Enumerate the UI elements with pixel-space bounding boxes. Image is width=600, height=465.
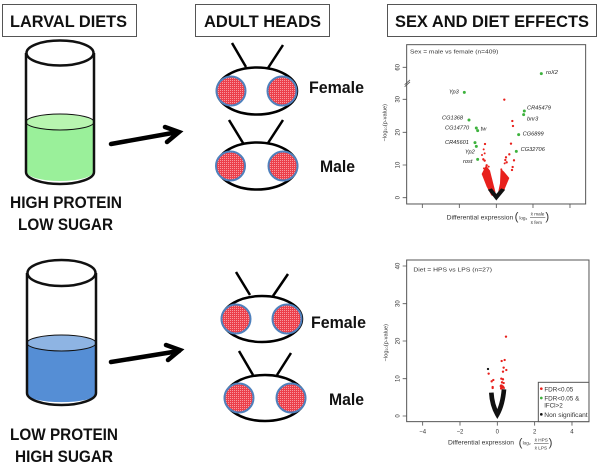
green highly differential genes [463,72,543,161]
x axis formula: ) [545,211,549,223]
label: high protein low sugar: HIGH PROTEIN [10,194,122,212]
arrow: high protein diet to adult heads [111,127,179,144]
heading: sex and diet effects [388,4,596,36]
y axis ticks and labels: 30 [395,300,401,307]
chart title: Diet = HPS vs LPS (n=27) [413,268,492,274]
icon: male head, high protein diet [216,120,298,190]
x axis title: Differential expression [448,440,514,446]
x axis formula: x̄ HPS [535,437,548,442]
legend: Non significant [544,412,588,419]
y axis ticks and labels: 2 [533,429,537,435]
red significant genes [481,98,515,197]
gene labels: rost [463,159,473,165]
label: low protein high sugar [10,426,118,465]
y axis ticks and labels: 0 [395,195,401,199]
legend: lFCl>2 [544,402,563,409]
chart: volcano plot diet effect [383,260,589,450]
x axis formula [515,211,549,225]
icon: female head, low protein diet [222,272,302,342]
y axis ticks and labels: 0 [496,429,500,435]
gene labels [442,70,559,165]
label: female: Female [311,314,366,332]
black non-significant genes [487,368,504,414]
legend: FDR<0.05 & [544,395,580,402]
gene labels: CR45601 [445,140,469,146]
gene labels: CR45479 [527,105,552,111]
icon: male head, low protein diet [224,351,306,421]
legend [538,382,589,422]
icon: vial with green high protein diet [26,40,94,184]
legend: FDR<0.05 [544,386,574,393]
gene labels: CG32706 [521,147,546,153]
x axis formula [519,437,553,450]
chart title: Sex = male vs female (n=409) [410,49,499,55]
y axis ticks and labels: 60 [395,63,401,71]
label: high protein low sugar [10,194,122,234]
y axis ticks and labels: 40 [395,262,401,269]
gene labels: bnr3 [527,117,539,123]
y axis ticks and labels: −2 [457,429,464,435]
x axis formula: x̄ fem [531,220,542,225]
x axis formula: log₂ [523,441,531,446]
label: female: Female [309,79,364,97]
y axis ticks and labels: 0 [395,414,401,418]
heading: larval diets [2,4,136,36]
gene labels: CG1368 [442,115,464,121]
x axis formula: x̄ LPS [535,445,547,450]
y axis ticks and labels: 4 [570,429,574,435]
label: low protein high sugar: LOW PROTEIN [10,426,118,444]
heading: sex and diet effects: SEX AND DIET EFFECTS [395,13,589,31]
y axis title: −log₁₀(p-value) [383,104,389,141]
y axis ticks and labels: −4 [419,429,427,435]
x axis title: Differential expression [447,215,513,221]
icon: vial with blue low protein diet [27,260,96,407]
x axis formula: ( [515,211,519,223]
y axis ticks and labels [395,262,574,435]
red significant genes [487,335,507,390]
label: male: Male [329,391,364,409]
gene labels: roX2 [546,70,559,76]
arrow: low protein diet to adult heads [111,345,180,362]
gene labels: Yp3 [449,90,460,96]
icon: female head, high protein diet [216,43,297,114]
heading: larval diets: LARVAL DIETS [10,13,127,31]
y axis title: −log₁₀(p-value) [383,324,389,361]
x axis formula: ( [519,437,523,449]
y axis ticks and labels: 10 [395,375,401,382]
y axis ticks and labels: 20 [395,128,401,136]
chart: volcano plot sex effect [383,45,586,225]
y axis ticks and labels: 10 [395,161,401,168]
label: high protein low sugar: LOW SUGAR [18,216,113,234]
gene labels: CG6899 [523,131,545,137]
x axis formula: log₂ [519,215,528,220]
label: male: Male [320,158,355,176]
black non-significant genes [489,189,504,200]
heading: adult heads: ADULT HEADS [204,13,321,31]
x axis formula: x̄ male [531,211,545,216]
gene labels: Yp2 [465,150,476,156]
y axis ticks and labels [395,63,570,208]
heading: adult heads [196,4,330,36]
gene labels: tw [481,127,487,133]
y axis ticks and labels: 30 [395,95,401,103]
gene labels: CG14770 [445,126,470,132]
y axis ticks and labels: 20 [395,337,401,344]
x axis formula: ) [549,437,553,449]
